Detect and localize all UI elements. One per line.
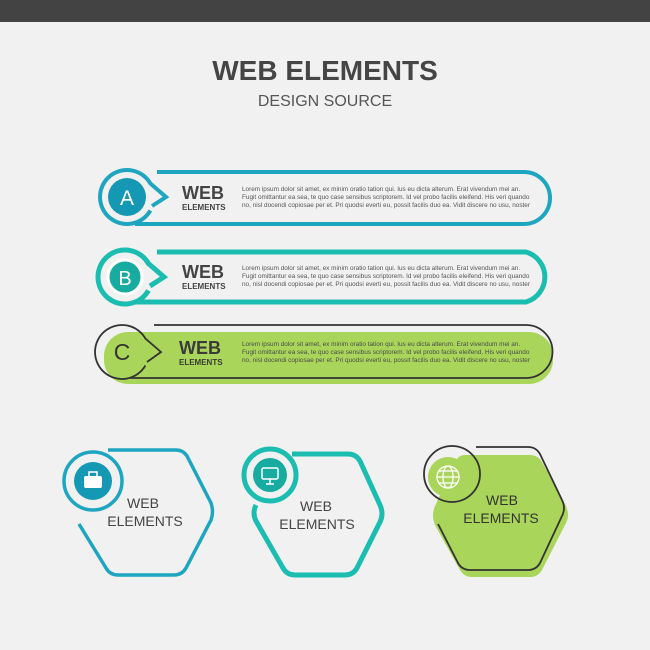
heading B (182, 262, 226, 291)
text block B: Fugit omittantur ea sea, te quo case sensibus scriptorem. Id vel probo facilis eleifend. His veri quando (242, 273, 530, 280)
text block C: no, nisl docendi copiosae per et. Pri quodsi everti eu, possit facilis duo ea. Vidit discere no usu, noster (242, 357, 531, 364)
heading B: WEB (182, 262, 224, 282)
text block C: Lorem ipsum dolor sit amet, ex minim oratio tation qui. Ius eu dicta alterum. Erat vivendum mei an. (242, 341, 520, 348)
title (212, 55, 438, 110)
label: WEB (127, 495, 159, 511)
heading A: ELEMENTS (182, 203, 226, 212)
panel: hexagon 2 (244, 449, 382, 575)
heading C (179, 338, 223, 367)
title: WEB ELEMENTS (212, 55, 438, 86)
text block B (242, 265, 531, 288)
text block A: Lorem ipsum dolor sit amet, ex minim oratio tation qui. Ius eu dicta alterum. Erat vivendum mei an. (242, 186, 520, 193)
label (463, 492, 539, 526)
title: DESIGN SOURCE (258, 93, 392, 110)
label (279, 498, 355, 532)
text block C: Fugit omittantur ea sea, te quo case sensibus scriptorem. Id vel probo facilis eleifend. His veri quando (242, 349, 530, 356)
heading C: ELEMENTS (179, 358, 223, 367)
icon: monitor (244, 449, 296, 501)
icon: B badge (108, 260, 142, 294)
label: WEB (300, 498, 332, 514)
text block B: no, nisl docendi copiosae per et. Pri quodsi everti eu, possit facilis duo ea. Vidit discere no usu, noster (242, 281, 531, 288)
text block A (242, 186, 531, 209)
label: ELEMENTS (107, 513, 183, 529)
icon: C letter: C (114, 339, 130, 365)
panel: hexagon 3 (424, 446, 568, 577)
heading B: ELEMENTS (182, 282, 226, 291)
heading C: WEB (179, 338, 221, 358)
text block C (242, 341, 531, 364)
text block A: no, nisl docendi copiosae per et. Pri quodsi everti eu, possit facilis duo ea. Vidit discere no usu, noster (242, 202, 531, 209)
label (107, 495, 183, 529)
heading A (182, 183, 226, 212)
icon: briefcase (64, 452, 122, 510)
panel: row A (100, 170, 550, 224)
panel: row C (95, 325, 553, 384)
panel: row B (98, 250, 545, 304)
text block A: Fugit omittantur ea sea, te quo case sensibus scriptorem. Id vel probo facilis eleifend. His veri quando (242, 194, 530, 201)
heading A: WEB (182, 183, 224, 203)
label: ELEMENTS (463, 510, 539, 526)
icon: A badge: A (120, 187, 134, 210)
icon: B badge: B (118, 268, 132, 290)
label: WEB (486, 492, 518, 508)
label: ELEMENTS (279, 516, 355, 532)
icon: A badge (108, 178, 146, 216)
panel: hexagon 1 (64, 450, 212, 575)
top bar (0, 0, 650, 22)
text block B: Lorem ipsum dolor sit amet, ex minim oratio tation qui. Ius eu dicta alterum. Erat vivendum mei an. (242, 265, 520, 272)
icon: globe (424, 446, 480, 502)
